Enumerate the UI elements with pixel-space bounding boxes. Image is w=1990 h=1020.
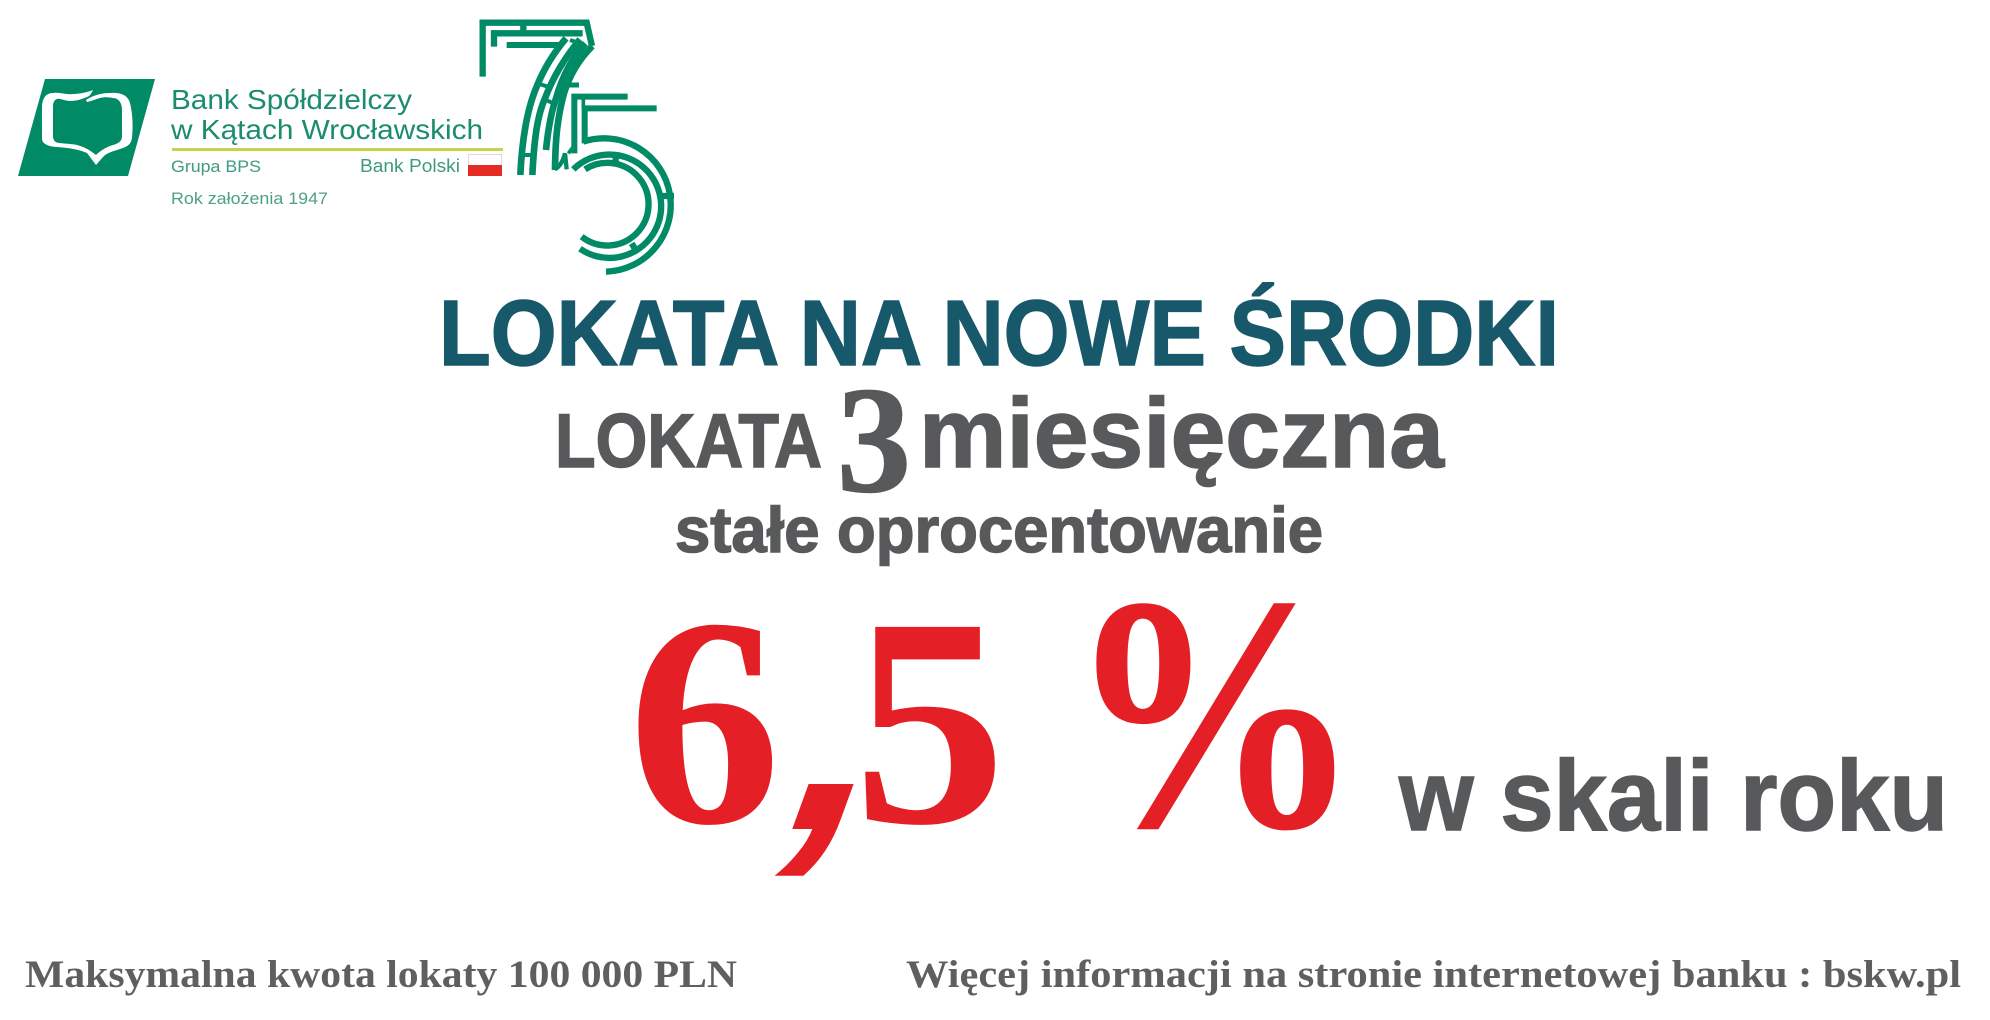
rate 6,5 %: , <box>747 555 958 893</box>
annual label: w skali roku <box>1398 740 1948 852</box>
icon: green parallelogram with white heart shield <box>18 79 155 176</box>
divider line <box>172 148 503 151</box>
icon: polish flag <box>468 154 502 176</box>
bank polski label: Bank Polski <box>360 156 460 176</box>
rate 6,5 %: 5 <box>853 557 1006 887</box>
fixed interest label: stałe oprocentowanie <box>675 494 1323 566</box>
footer: maximum amount: Maksymalna kwota lokaty 100 000 PLN <box>25 953 737 996</box>
subtitle: 3-month deposit: miesięczna <box>919 378 1445 488</box>
footer: more information: Więcej informacji na stronie internetowej banku : bskw.pl <box>906 953 1961 996</box>
subtitle: 3-month deposit <box>555 356 1445 524</box>
founding year: Rok założenia 1947 <box>171 189 328 208</box>
rate 6,5 %: % <box>1066 528 1362 899</box>
rate 6,5 %: 6 <box>628 557 781 887</box>
bank name: w Kątach Wrocławskich <box>170 114 483 145</box>
subtitle: 3-month deposit: 3 <box>837 356 911 524</box>
icon: 75 anniversary mark <box>483 23 674 272</box>
title: LOKATA NA NOWE ŚRODKI <box>439 281 1559 385</box>
bank name: Bank Spółdzielczy <box>171 84 412 115</box>
bank logo <box>18 79 503 208</box>
group label: Grupa BPS <box>171 157 261 176</box>
subtitle: 3-month deposit: LOKATA <box>555 399 822 484</box>
bank name <box>170 84 483 145</box>
rate 6,5 % <box>628 528 1362 899</box>
